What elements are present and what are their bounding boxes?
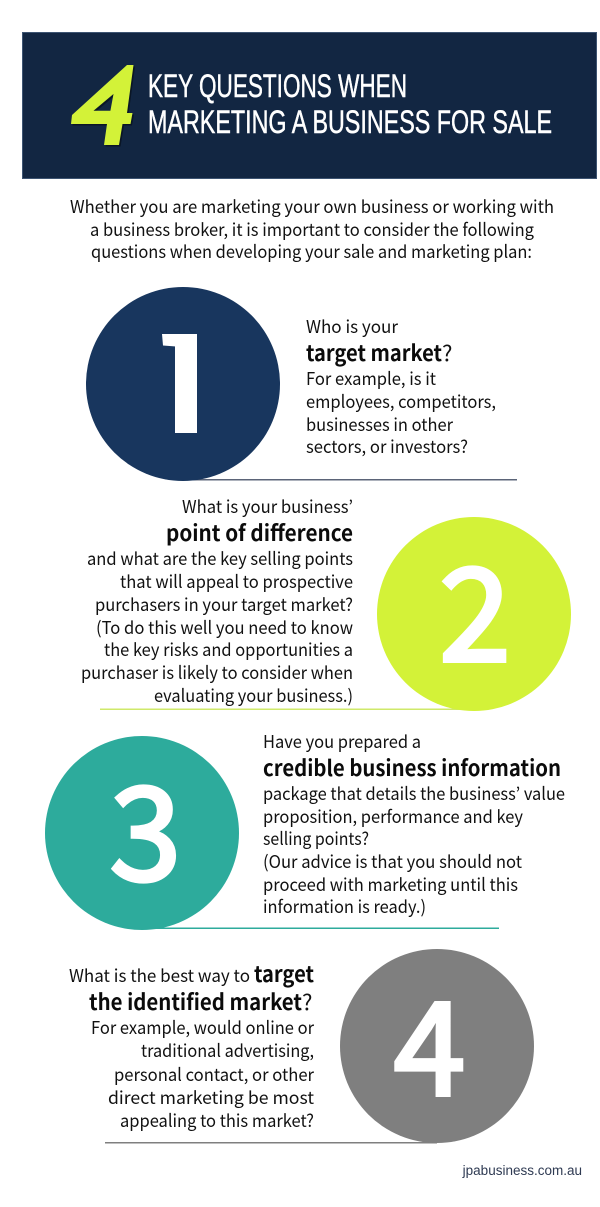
text 1: employees, competitors, (306, 389, 496, 414)
circle 2 (377, 517, 571, 711)
text 2: (To do this well you need to know (96, 615, 353, 640)
text 2: evaluating your business.) (154, 683, 353, 708)
text 4: personal contact, or other (114, 1062, 314, 1087)
circle 3 (45, 736, 239, 930)
text 4: ? (302, 985, 312, 1017)
text 2 (81, 494, 353, 708)
intro text: questions when developing your sale and marketing plan: (91, 239, 532, 264)
intro text (70, 194, 554, 264)
text 3: package that details the business’ value (263, 781, 565, 806)
text 3: information is ready.) (263, 894, 426, 919)
text 3: credible business information (263, 751, 561, 783)
text 3: Have you prepared a (263, 729, 421, 754)
text 3: proposition, performance and key (263, 804, 523, 829)
divider line 3 (142, 928, 499, 929)
text 3: (Our advice is that you should not (263, 849, 522, 874)
text 2: purchasers in your target market? (95, 592, 353, 617)
text 3 (263, 729, 565, 919)
panel: question 4 (69, 946, 534, 1144)
text 2: purchaser is likely to consider when (81, 660, 353, 685)
big 4 shadow (72, 66, 135, 146)
title (148, 68, 552, 140)
footer website: jpabusiness.com.au (462, 1163, 582, 1178)
panel: question 2 (81, 494, 571, 711)
text 3: proceed with marketing until this (263, 872, 518, 897)
divider line 2 (100, 708, 474, 710)
text 1 (306, 314, 496, 459)
text 2: the key risks and opportunities a (104, 637, 353, 662)
text 2: that will appeal to prospective (120, 569, 353, 594)
circle 1 (86, 287, 280, 481)
numeral 1 (162, 334, 197, 433)
divider line 4 (105, 1142, 437, 1144)
text 4: What is the best way to (69, 963, 250, 988)
intro text: a business broker, it is important to consider the following (90, 217, 534, 242)
header banner (22, 32, 596, 178)
text 4 (69, 957, 314, 1133)
text 4: direct marketing be most (108, 1085, 314, 1110)
text 1: ? (442, 336, 452, 368)
circle 4 (340, 949, 534, 1143)
text 2: and what are the key selling points (87, 546, 353, 571)
panel: question 1 (86, 287, 517, 481)
panel: question 3 (45, 729, 565, 930)
text 4: For example, would online or (91, 1015, 314, 1040)
text 2: What is your business’ (182, 494, 353, 519)
text 1: sectors, or investors? (306, 434, 468, 459)
title: KEY QUESTIONS WHEN (148, 68, 407, 104)
numeral 2: 2 (439, 512, 511, 699)
numeral 4: 4 (394, 946, 465, 1133)
text 1: target market (306, 336, 442, 368)
text 4: traditional advertising, (141, 1038, 314, 1063)
text 1: For example, is it (306, 366, 436, 391)
text 3: selling points? (263, 826, 369, 851)
text 2: point of difference (166, 516, 353, 548)
intro text: Whether you are marketing your own business or working with (70, 194, 554, 219)
icon: big lime 4 (71, 65, 134, 145)
text 4: target (254, 957, 314, 989)
divider line 1 (183, 479, 517, 480)
numeral 3: 3 (110, 731, 181, 918)
text 1: businesses in other (306, 412, 453, 437)
numeral 1: 1 (146, 306, 223, 463)
text 4: appealing to this market? (120, 1108, 314, 1133)
text 1: Who is your (306, 314, 398, 339)
text 4: the identified market (89, 985, 302, 1017)
